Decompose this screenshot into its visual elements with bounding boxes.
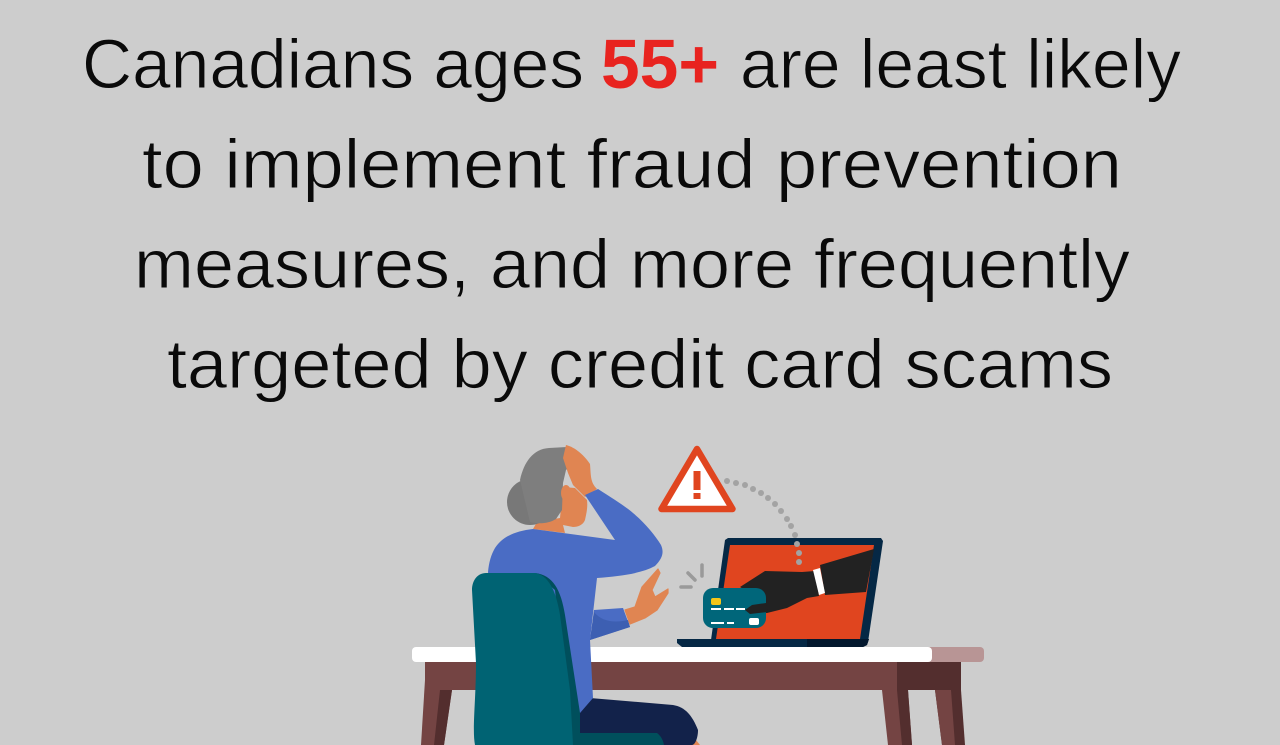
woman: [472, 445, 700, 745]
title: measures, and more frequently: [134, 225, 1130, 303]
neck and face: [533, 487, 587, 533]
warning triangle: [662, 449, 732, 509]
table: [412, 647, 984, 745]
title: are least likely: [740, 25, 1181, 103]
laptop: [677, 538, 883, 647]
sweater: [488, 489, 663, 713]
dotted path: [724, 478, 802, 565]
illustration: worried woman at laptop: [412, 445, 984, 745]
chair: [472, 573, 664, 745]
hair: [507, 447, 574, 525]
alert sparks: [681, 565, 702, 587]
lowered hand: [625, 569, 668, 624]
raised hand: [563, 445, 597, 497]
title: 55+: [601, 25, 719, 103]
title: Canadians ages: [82, 25, 584, 103]
hacker arm: [740, 549, 874, 614]
title: to implement fraud prevention: [142, 125, 1122, 203]
ear: [561, 485, 571, 501]
credit card: [703, 588, 768, 628]
title: targeted by credit card scams: [167, 325, 1113, 403]
forearm: [590, 608, 630, 640]
title: [82, 25, 1181, 403]
trousers: [575, 698, 698, 745]
lower leg: [686, 735, 700, 745]
